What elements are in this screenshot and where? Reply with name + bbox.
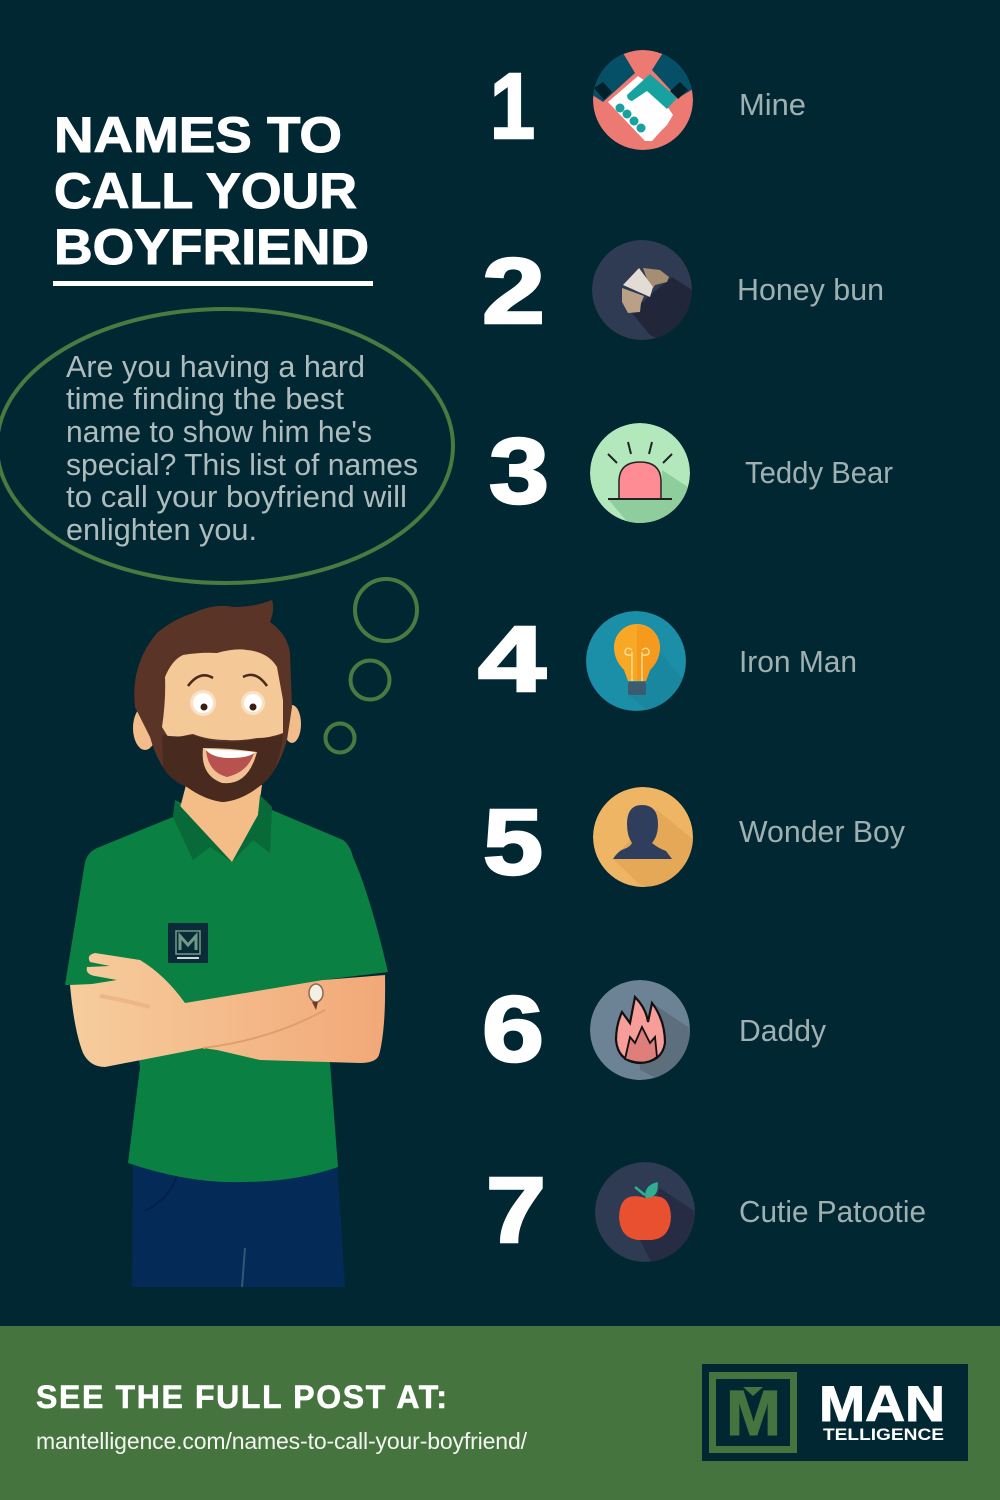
crossed arms [70, 953, 385, 1067]
item 2: Honey bun: 2 [482, 239, 545, 343]
collar [173, 795, 272, 862]
logo: TELLIGENCE [823, 1425, 944, 1444]
face [162, 649, 283, 740]
thought bubble with intro text: enlighten you. [66, 512, 257, 547]
call to action text: SEE THE FULL POST AT: [36, 1379, 447, 1415]
shirt badge [168, 923, 208, 963]
illustration: smiling bearded man with crossed arms [65, 600, 388, 1287]
icon: flame [590, 980, 690, 1080]
title: BOYFRIEND [54, 219, 369, 275]
title: NAMES TO [54, 107, 342, 163]
item 3: Teddy Bear [490, 423, 892, 523]
footer band [0, 1326, 1000, 1500]
item 1: Mine: 1 [490, 54, 535, 158]
item 6: Daddy: Daddy [739, 1013, 826, 1048]
item 7: Cutie Patootie [489, 1162, 925, 1262]
item 6: Daddy: 6 [482, 977, 544, 1081]
item 4: Iron Man: 4 [478, 607, 546, 711]
item 1: Mine: Mine [739, 87, 806, 122]
title: CALL YOUR [54, 163, 357, 219]
item 3: Teddy Bear: Teddy Bear [745, 455, 893, 490]
thought bubble with intro text: name to show him he's [66, 414, 372, 449]
thought bubble trail circles [326, 579, 417, 752]
neck [180, 785, 262, 862]
shirt [65, 795, 388, 1182]
icon: person silhouette [593, 787, 700, 890]
item 5: Wonder Boy [483, 787, 905, 894]
item 2: Honey bun: Honey bun [737, 272, 884, 307]
icon: apple [595, 1162, 695, 1262]
logo: M [726, 1377, 781, 1449]
logo: MAN [819, 1376, 945, 1432]
item 1: Mine [494, 50, 805, 150]
mouth [203, 748, 257, 783]
item 5: Wonder Boy: 5 [483, 790, 543, 894]
item 2: Honey bun [482, 239, 884, 345]
item 7: Cutie Patootie: Cutie Patootie [739, 1194, 926, 1229]
item 4: Iron Man [478, 611, 856, 711]
ears [133, 705, 301, 750]
thought bubble with intro text: Are you having a hard [66, 349, 365, 384]
logo [702, 1364, 968, 1461]
item 5: Wonder Boy: Wonder Boy [739, 814, 905, 849]
beard lower tone [162, 735, 283, 802]
item 3: Teddy Bear: 3 [489, 419, 549, 523]
trousers [132, 1160, 345, 1287]
icon: light bulb [586, 611, 686, 711]
item 7: Cutie Patootie: 7 [486, 1158, 546, 1262]
post url: mantelligence.com/names-to-call-your-boyfriend/ [36, 1428, 528, 1454]
thought bubble with intro text: to call your boyfriend will [66, 479, 407, 514]
hair and beard [134, 600, 292, 802]
icon: croissant [592, 240, 692, 340]
icon: alarm siren [590, 423, 690, 523]
item 4: Iron Man: Iron Man [739, 644, 857, 679]
thought bubble with intro text: special? This list of names [66, 447, 418, 482]
title [53, 107, 373, 286]
eyes and eyebrows [188, 675, 267, 716]
icon: handshake [593, 50, 693, 150]
wristwatch [309, 984, 323, 1010]
item 6: Daddy [482, 977, 826, 1085]
thought bubble with intro text [0, 309, 453, 583]
thought bubble with intro text: time finding the best [66, 381, 344, 416]
